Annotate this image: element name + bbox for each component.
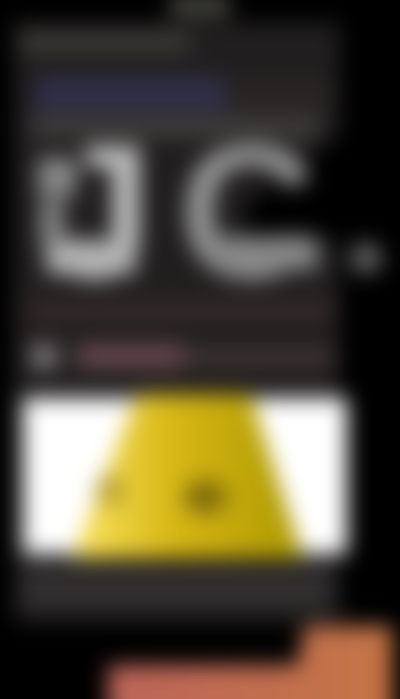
- yellow trapezoid object: [72, 394, 303, 558]
- black shadow inside headline: [245, 125, 350, 240]
- headline: large characters: C: [178, 104, 317, 319]
- panel: main dark card: [14, 22, 340, 622]
- heading: blue text band: [35, 76, 330, 110]
- highlighted red label: [76, 344, 184, 368]
- headline: large characters: [38, 104, 382, 319]
- caption text band: [22, 566, 330, 610]
- right dark spot: [183, 480, 227, 514]
- intro text band: [30, 114, 320, 138]
- white backdrop: [23, 398, 347, 554]
- photo: white backdrop with yellow object: [23, 394, 347, 558]
- orange corner shape: [108, 626, 392, 699]
- subtitle text band: [20, 32, 190, 52]
- top caption: [170, 0, 230, 18]
- black gap above orange: [0, 624, 296, 658]
- text row: muted red line: [25, 298, 335, 324]
- bullet row: [31, 344, 334, 369]
- headline: large characters: J: [46, 104, 153, 319]
- icon: grey bullet: [31, 344, 57, 369]
- left dark spot: [96, 474, 124, 506]
